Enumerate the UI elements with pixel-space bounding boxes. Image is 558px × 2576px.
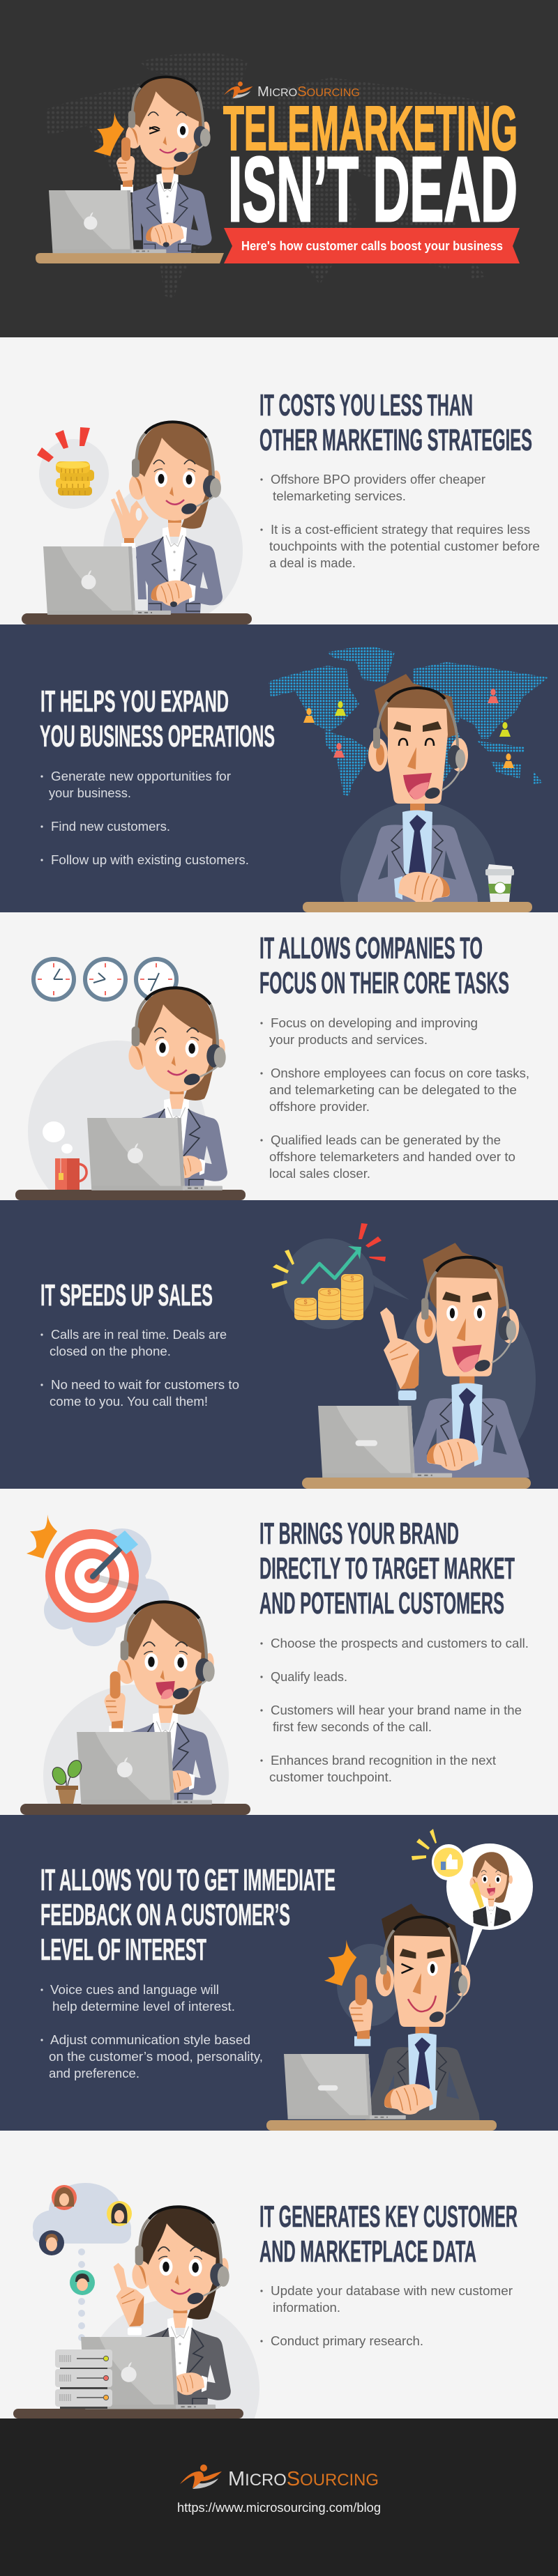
- bullet list: Find new customers.: [51, 820, 170, 834]
- illustration: woman pointing up with laptop: [13, 2205, 259, 2418]
- illustration: winking man thumbs up with laptop: [266, 1903, 497, 2131]
- heading: LEVEL OF INTEREST: [40, 1933, 206, 1967]
- bullet list: offshore telemarketers and handed over to: [269, 1150, 515, 1164]
- icon: target with dart on cloud: [27, 1515, 169, 1646]
- icon: coins with red sparks: [37, 427, 109, 509]
- bullet list: information.: [273, 2301, 340, 2315]
- bullet list: Focus on developing and improving: [271, 1016, 478, 1030]
- icon: server stack: [55, 2349, 112, 2409]
- icon: orange burst: [93, 112, 124, 156]
- illustration: woman behind laptop with tea: [15, 987, 246, 1222]
- logo: MICROSOURCING: [257, 84, 360, 100]
- panel: costs less: [0, 337, 558, 624]
- bullet list: Generate new opportunities for: [51, 769, 231, 783]
- panel: customer and marketplace data: [13, 2183, 518, 2418]
- bullet list: and telemarketing can be delegated to the: [269, 1083, 517, 1097]
- illustration: woman with OK hand and laptop: [22, 421, 252, 624]
- heading: IT SPEEDS UP SALES: [40, 1279, 213, 1312]
- heading: FEEDBACK ON A CUSTOMER’S: [40, 1899, 290, 1932]
- bullet list: Customers will hear your brand name in the: [271, 1703, 522, 1717]
- heading: IT HELPS YOU EXPAND: [40, 685, 229, 719]
- heading: [259, 932, 509, 1000]
- heading: [40, 685, 275, 753]
- icon: three wall clocks: [33, 959, 176, 999]
- bullet list: No need to wait for customers to: [51, 1378, 239, 1392]
- bullet list: your business.: [49, 786, 131, 800]
- speech bubble with growth chart and coins: $: [303, 1298, 308, 1305]
- footer panel: [0, 2418, 558, 2576]
- bullet list: Choose the prospects and customers to call.: [271, 1636, 529, 1650]
- bullet list: local sales closer.: [269, 1167, 370, 1181]
- heading: YOU BUSINESS OPERATIONS: [40, 720, 275, 753]
- bullet list: [40, 1983, 263, 2080]
- bullet list: [260, 1016, 529, 1181]
- illustration: woman thumbs up with plant: [20, 1600, 250, 1815]
- bullet list: help determine level of interest.: [52, 2000, 235, 2014]
- thought bubble: customer on phone with thumbs up: [412, 1829, 533, 1968]
- heading: [259, 2200, 518, 2269]
- bullet list: [40, 769, 249, 867]
- logo: [224, 82, 360, 100]
- bullet list: Voice cues and language will: [50, 1983, 219, 1997]
- bullet list: Follow up with existing customers.: [51, 853, 249, 867]
- bullet list: Update your database with new customer: [271, 2284, 513, 2298]
- footer url: https://www.microsourcing.com/blog: [177, 2501, 381, 2515]
- bullet list: and preference.: [49, 2067, 140, 2080]
- title: [223, 94, 518, 240]
- bullet list: Qualified leads can be generated by the: [271, 1133, 501, 1147]
- icon: coffee cup: [485, 864, 514, 902]
- icon: cloud with customer avatars and servers: [33, 2183, 132, 2341]
- bullet list: Adjust communication style based: [50, 2033, 250, 2047]
- bullet list: Qualify leads.: [271, 1670, 347, 1684]
- heading: [259, 389, 532, 457]
- panel: brand to target market: [20, 1515, 527, 1815]
- bullet list: on the customer’s mood, personality,: [49, 2050, 263, 2064]
- illustration: man pointing up with laptop: [302, 1243, 536, 1489]
- bullet list: Calls are in real time. Deals are: [51, 1328, 227, 1342]
- footer logo: MICROSOURCING: [228, 2468, 379, 2490]
- panel: speeds up sales: [0, 1200, 558, 1489]
- bullet list: first few seconds of the call.: [273, 1720, 432, 1734]
- header panel: [0, 0, 558, 337]
- bullet list: telemarketing services.: [273, 489, 406, 503]
- banner subtitle: Here's how customer calls boost your business: [241, 239, 503, 253]
- bullet list: [260, 1636, 529, 1784]
- bullet list: touchpoints with the potential customer before: [269, 539, 540, 553]
- bullet list: Onshore employees can focus on core tasks,: [271, 1066, 529, 1080]
- bullet list: Offshore BPO providers offer cheaper: [271, 473, 485, 486]
- footer logo: [180, 2464, 379, 2490]
- speech bubble with growth chart and coins: $: [350, 1275, 354, 1282]
- heading: [40, 1864, 335, 1967]
- bullet list: [40, 1328, 239, 1409]
- panel: immediate feedback: [0, 1815, 558, 2131]
- bullet list: your products and services.: [269, 1033, 428, 1047]
- panel: core tasks: [15, 937, 529, 1200]
- bullet list: come to you. You call them!: [50, 1395, 208, 1409]
- bullet list: [260, 2284, 513, 2348]
- heading: [259, 1517, 515, 1620]
- banner subtitle: [224, 228, 520, 263]
- bullet list: a deal is made.: [269, 556, 356, 570]
- bullet list: customer touchpoint.: [269, 1770, 392, 1784]
- speech bubble with growth chart and coins: $: [327, 1289, 331, 1296]
- illustration: cheerful man with coffee: [303, 674, 532, 912]
- icon: red mug with steam: [43, 1121, 86, 1190]
- bullet list: Enhances brand recognition in the next: [271, 1754, 496, 1768]
- bullet list: [260, 473, 540, 570]
- icon: potted plant: [50, 1758, 84, 1804]
- dotted world map background: [45, 52, 495, 298]
- bullet list: closed on the phone.: [50, 1344, 171, 1358]
- map with customer pins: [269, 647, 548, 796]
- speech bubble with growth chart and coins: [271, 1223, 409, 1329]
- bullet list: offshore provider.: [269, 1100, 370, 1114]
- bullet list: Conduct primary research.: [271, 2334, 423, 2348]
- bullet list: It is a cost-efficient strategy that requires less: [271, 523, 530, 537]
- illustration: winking woman with laptop: [36, 76, 224, 263]
- panel: expand operations: [0, 624, 558, 912]
